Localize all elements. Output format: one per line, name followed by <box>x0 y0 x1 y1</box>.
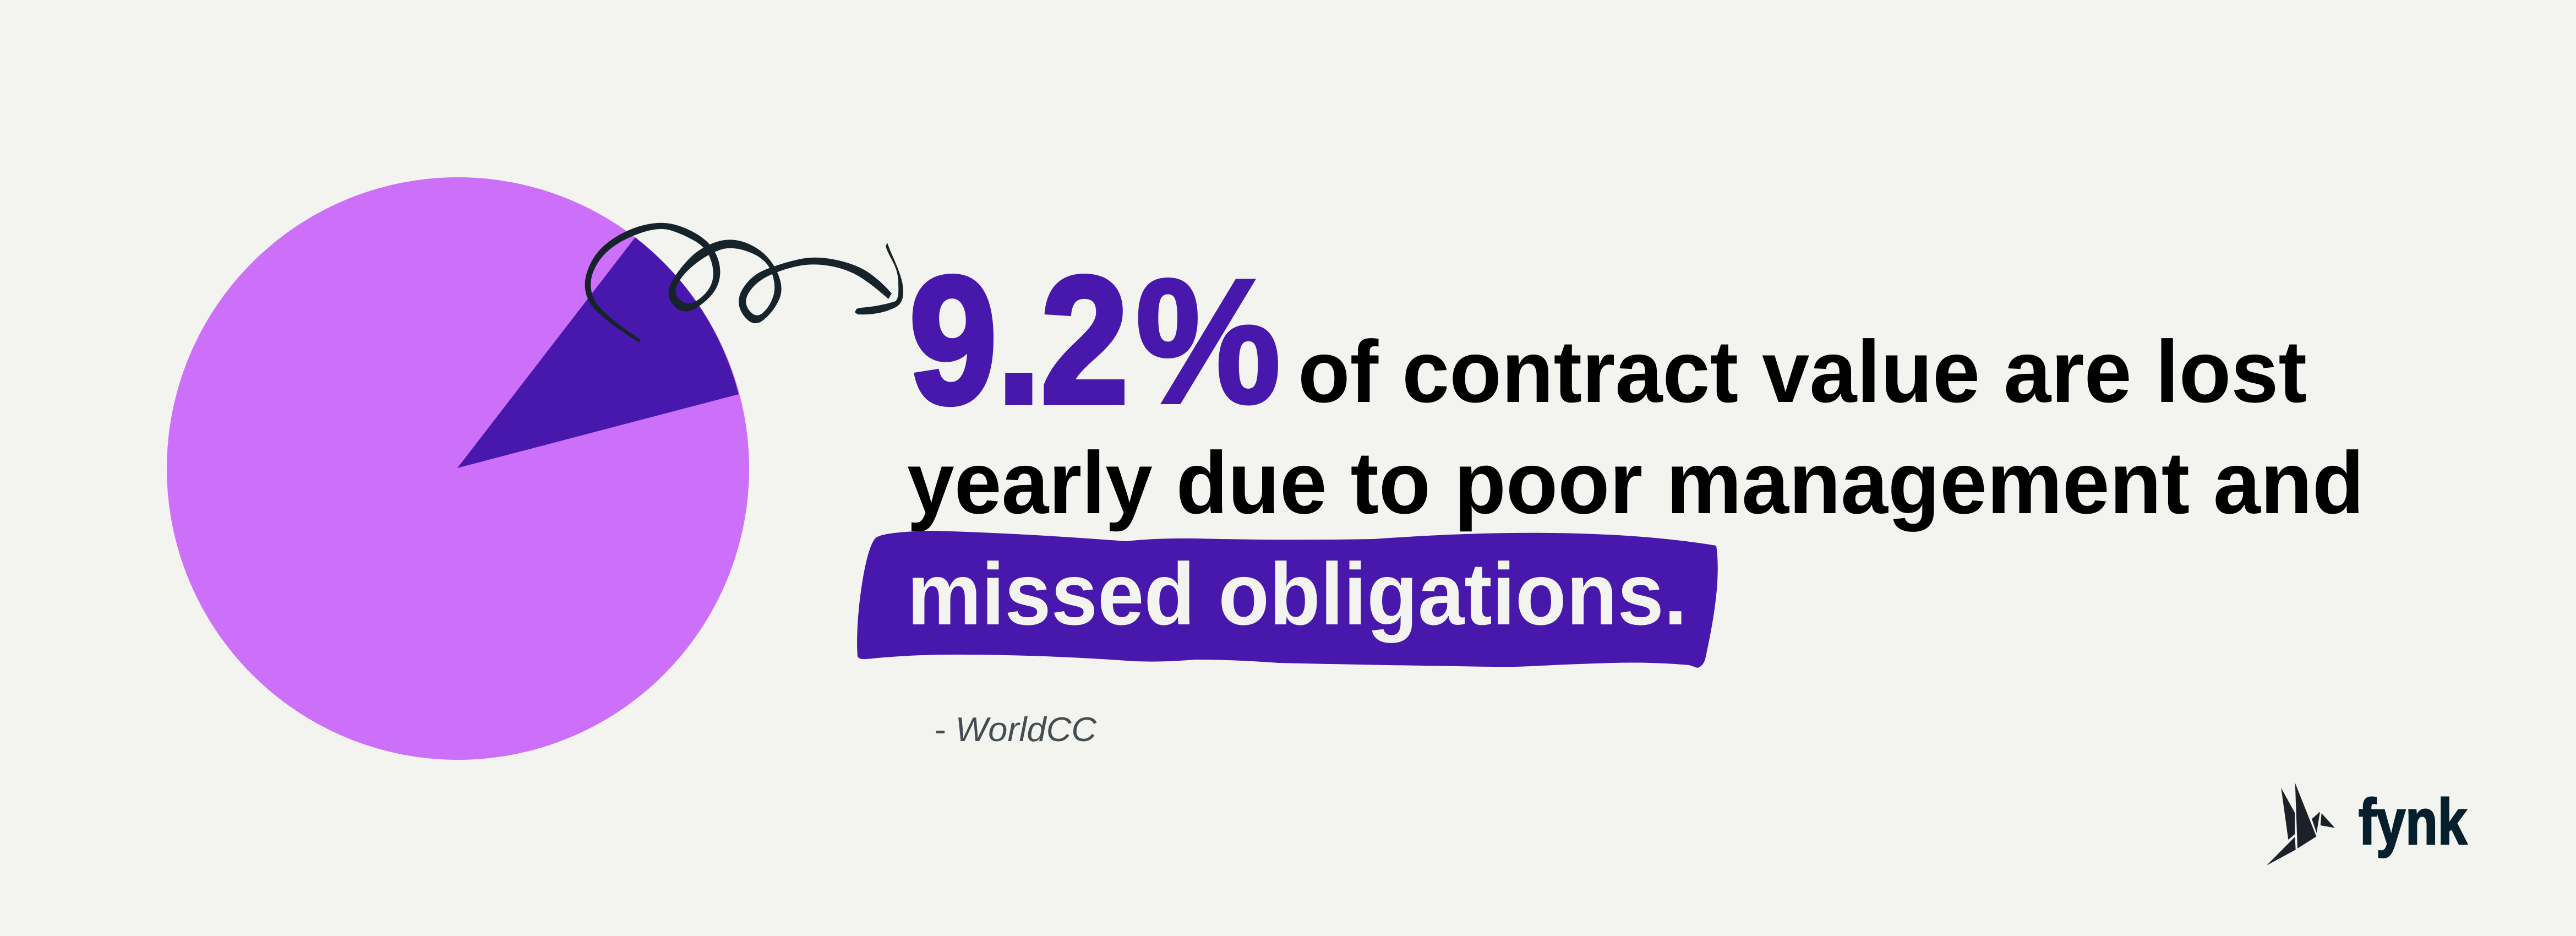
pie highlighted slice <box>457 237 739 468</box>
highlighted text: missed obligations. <box>907 545 1687 643</box>
brush highlight shape <box>857 531 1718 668</box>
statistic: 9.2%: % <box>1136 243 1281 440</box>
fynk logo <box>2267 783 2468 866</box>
highlighted phrase <box>857 531 1718 668</box>
icon: origami bird <box>2267 783 2335 866</box>
pie chart: 9.2% share <box>167 177 749 760</box>
statistic: 9.2% <box>909 239 1281 441</box>
source attribution: - WorldCC <box>934 711 1097 749</box>
headline line 2: yearly due to poor management and <box>907 433 2364 532</box>
headline line 1: of contract value are lost <box>1298 322 2307 421</box>
pie base slice <box>167 177 749 760</box>
logo wordmark: fynk <box>2359 786 2468 858</box>
statistic: 9.2%: 9.2 <box>909 239 1128 441</box>
icon: curly arrow pointing to statistic <box>585 223 903 342</box>
